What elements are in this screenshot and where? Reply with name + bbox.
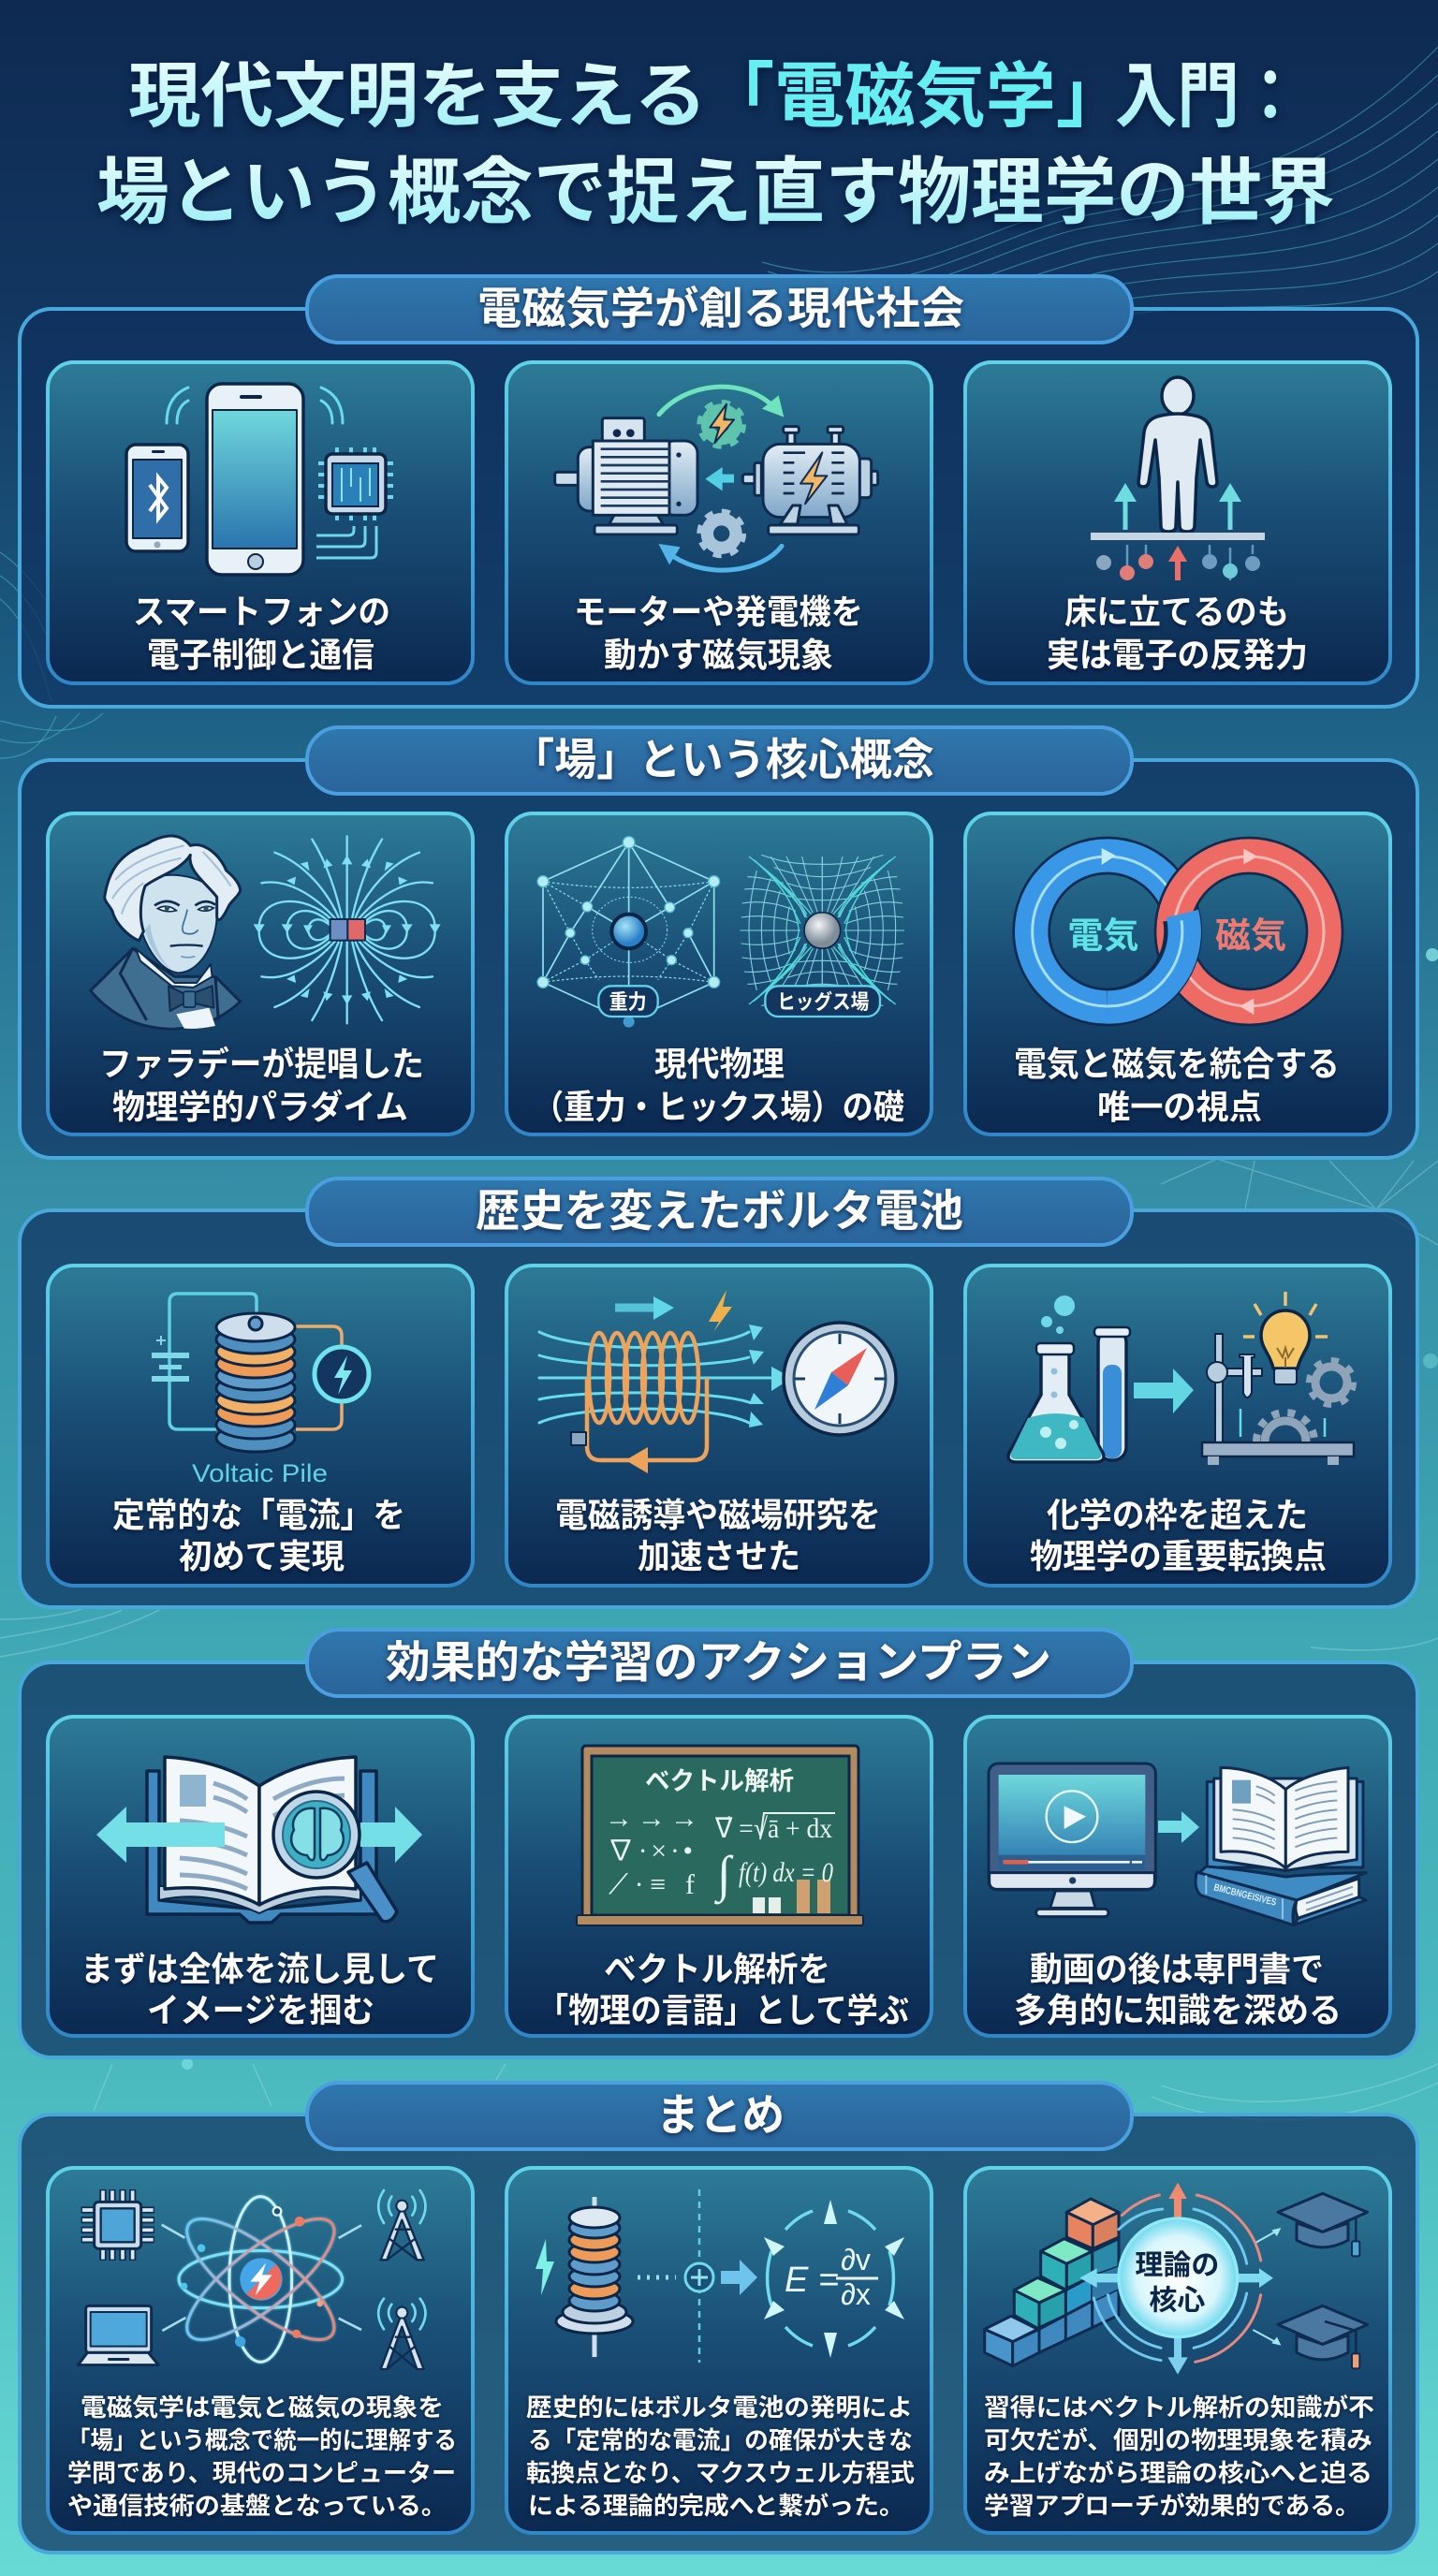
caption: 物理学的パラダイム xyxy=(112,1088,408,1126)
card: smartphone xyxy=(48,362,473,683)
summary text: 可欠だが、個別の物理現象を積み xyxy=(984,2426,1372,2454)
caption: ファラデーが提唱した xyxy=(99,1045,424,1083)
card: unified view xyxy=(965,813,1390,1134)
icon: blackboard: f(t) dx = 0 xyxy=(739,1857,833,1888)
caption xyxy=(1030,1496,1327,1575)
title: 現代文明を支える xyxy=(128,57,707,137)
card: modern physics xyxy=(506,813,932,1134)
caption: 動かす磁気現象 xyxy=(604,636,833,674)
caption: スマートフォンの xyxy=(133,593,390,631)
caption xyxy=(99,1045,424,1126)
icon: electricity and magnetism infinity loop xyxy=(1032,848,1325,1015)
caption xyxy=(112,1496,405,1575)
summary text: 「場」という概念で統一的に理解する xyxy=(67,2426,457,2454)
icon: open book with magnifier xyxy=(96,1757,422,1923)
caption xyxy=(537,1950,909,2029)
caption: 「物理の言語」として学ぶ xyxy=(537,1991,909,2029)
section heading pill: 電磁気学が創る現代社会 xyxy=(477,284,964,333)
icon: gravity lattice xyxy=(537,837,720,1028)
card: summary 2 xyxy=(506,2168,932,2533)
icon: electricity and magnetism infinity loop: 磁気 xyxy=(1215,917,1286,957)
icon: theory core: 核心 xyxy=(1149,2286,1205,2317)
caption xyxy=(81,1950,439,2029)
label: Voltaic Pile: Voltaic Pile xyxy=(192,1459,328,1487)
card: vector analysis xyxy=(506,1717,932,2036)
caption: 加速させた xyxy=(638,1537,800,1575)
icon: blackboard: ∇·×·• xyxy=(607,1836,693,1866)
section heading pill: 「場」という核心概念 xyxy=(512,735,934,784)
icon: motor and generator xyxy=(555,387,878,570)
caption: まずは全体を流し見して xyxy=(81,1950,439,1988)
icon: magnetic field lines xyxy=(254,836,441,1023)
icon: gravity lattice: 重力 xyxy=(609,990,647,1014)
title: 入門： xyxy=(1115,57,1301,137)
card: voltaic pile xyxy=(48,1266,473,1586)
panel: 電磁気学が創る現代社会 xyxy=(20,276,1417,707)
caption: ベクトル解析を xyxy=(604,1950,830,1988)
caption xyxy=(1047,593,1308,674)
icon: pile to Maxwell equation xyxy=(536,2189,904,2363)
caption: 電子制御と通信 xyxy=(147,636,374,674)
card: Faraday xyxy=(48,813,473,1134)
icon: pile to Maxwell equation: ∂x xyxy=(841,2277,871,2311)
summary text xyxy=(984,2393,1374,2520)
caption: 電気と磁気を統合する xyxy=(1014,1045,1340,1083)
icon: electricity and magnetism infinity loop: 電気 xyxy=(1067,917,1138,957)
summary text: る「定常的な電流」の確保が大きな xyxy=(528,2426,913,2454)
caption xyxy=(1014,1950,1342,2029)
section heading pill: 効果的な学習のアクションプラン xyxy=(386,1637,1051,1687)
caption: 多角的に知識を深める xyxy=(1014,1991,1342,2029)
caption: モーターや発電機を xyxy=(574,593,863,631)
caption: 動画の後は専門書で xyxy=(1030,1950,1324,1988)
card: summary 3 xyxy=(965,2168,1390,2533)
section heading pill xyxy=(307,727,1132,794)
caption: 床に立てるのも xyxy=(1064,593,1289,631)
caption: イメージを掴む xyxy=(147,1991,374,2029)
icon: monitor with play button xyxy=(989,1764,1155,1917)
icon: phones and chip xyxy=(126,384,393,575)
caption xyxy=(533,1045,904,1126)
caption xyxy=(555,1496,881,1575)
summary text: 習得にはベクトル解析の知識が不 xyxy=(984,2393,1374,2422)
card: skim xyxy=(48,1717,473,2036)
card: electromagnetic induction xyxy=(506,1266,932,1586)
icon: blackboard: ∇⃗ =√ā + dx xyxy=(714,1813,832,1844)
panel: 歴史を変えたボルタ電池 xyxy=(20,1178,1417,1607)
section heading pill xyxy=(307,2083,1132,2149)
icon: graduation caps xyxy=(1253,2193,1368,2368)
summary text: み上げながら理論の核心へと迫る xyxy=(984,2459,1372,2487)
icon: voltaic pile xyxy=(152,1294,369,1452)
summary text xyxy=(526,2393,915,2520)
icon: coil and compass xyxy=(539,1290,896,1473)
icon: theory core xyxy=(1079,2183,1273,2375)
icon: books: BMCBNGEISIVES xyxy=(1212,1882,1277,1909)
icon: blackboard: ⟋·≡ f xyxy=(609,1869,695,1900)
arrow xyxy=(1134,1368,1194,1413)
icon: blackboard xyxy=(577,1746,863,1925)
card: motor and generator xyxy=(506,362,932,683)
caption xyxy=(133,593,390,674)
card: video and books xyxy=(965,1717,1390,2036)
icon: theory core: 理論の xyxy=(1135,2250,1219,2281)
section heading pill: まとめ xyxy=(656,2090,785,2140)
summary text: 電磁気学は電気と磁気の現象を xyxy=(81,2393,444,2422)
icon: blackboard: →→→ xyxy=(605,1803,698,1834)
icon: person and electron repulsion xyxy=(1091,377,1265,580)
icon: blackboard: ∫ xyxy=(714,1846,734,1905)
section heading pill xyxy=(307,276,1132,343)
caption xyxy=(1014,1045,1340,1126)
card: turning point xyxy=(965,1266,1390,1586)
caption: 電磁誘導や磁場研究を xyxy=(555,1496,881,1534)
icon: blackboard: ベクトル解析 xyxy=(645,1767,794,1795)
section heading pill: 歴史を変えたボルタ電池 xyxy=(476,1186,963,1236)
icon: staircase of blocks xyxy=(985,2199,1119,2366)
icon: Higgs field xyxy=(741,855,904,1017)
caption: 初めて実現 xyxy=(179,1537,345,1575)
summary text: 転換点となり、マクスウェル方程式 xyxy=(526,2459,915,2487)
card: summary 1 xyxy=(48,2168,473,2533)
panel: 効果的な学習のアクションプラン xyxy=(20,1630,1417,2057)
panel: 「場」という核心概念 xyxy=(20,727,1417,1158)
caption: 定常的な「電流」を xyxy=(112,1496,405,1534)
caption: 物理学の重要転換点 xyxy=(1030,1537,1327,1575)
summary text xyxy=(67,2393,457,2520)
arrow xyxy=(1158,1811,1199,1843)
card: standing on floor xyxy=(965,362,1390,683)
caption xyxy=(574,593,863,674)
section heading pill xyxy=(307,1630,1132,1696)
caption: 化学の枠を超えた xyxy=(1047,1496,1308,1534)
icon: pile to Maxwell equation: ∂v xyxy=(841,2243,871,2276)
icon: lab stand, bulb and gears xyxy=(1202,1292,1354,1465)
summary text: 学問であり、現代のコンピューター xyxy=(67,2459,456,2487)
icon: flask and test tube xyxy=(1008,1295,1130,1462)
summary text: 学習アプローチが効果的である。 xyxy=(984,2492,1360,2520)
caption: 現代物理 xyxy=(654,1045,785,1083)
summary text: や通信技術の基盤となっている。 xyxy=(67,2492,447,2520)
summary text: 歴史的にはボルタ電池の発明によ xyxy=(526,2393,913,2422)
section heading pill xyxy=(307,1178,1132,1245)
title: 「電磁気学」 xyxy=(704,57,1126,137)
icon: pile to Maxwell equation: E = xyxy=(785,2261,839,2300)
title: 場という概念で捉え直す物理学の世界 xyxy=(96,151,1335,233)
summary text: による理論的完成へと繋がった。 xyxy=(528,2492,904,2520)
icon: Higgs field: ヒッグス場 xyxy=(777,990,869,1014)
icon: atom with chip, laptop and towers xyxy=(78,2189,425,2369)
caption: 実は電子の反発力 xyxy=(1047,636,1308,674)
caption: 唯一の視点 xyxy=(1097,1088,1262,1126)
caption: （重力・ヒックス場）の礎 xyxy=(533,1088,904,1126)
title xyxy=(96,57,1335,233)
panel: まとめ xyxy=(20,2083,1417,2553)
icon: books xyxy=(1196,1767,1366,1925)
icon: Faraday portrait xyxy=(91,836,241,1029)
